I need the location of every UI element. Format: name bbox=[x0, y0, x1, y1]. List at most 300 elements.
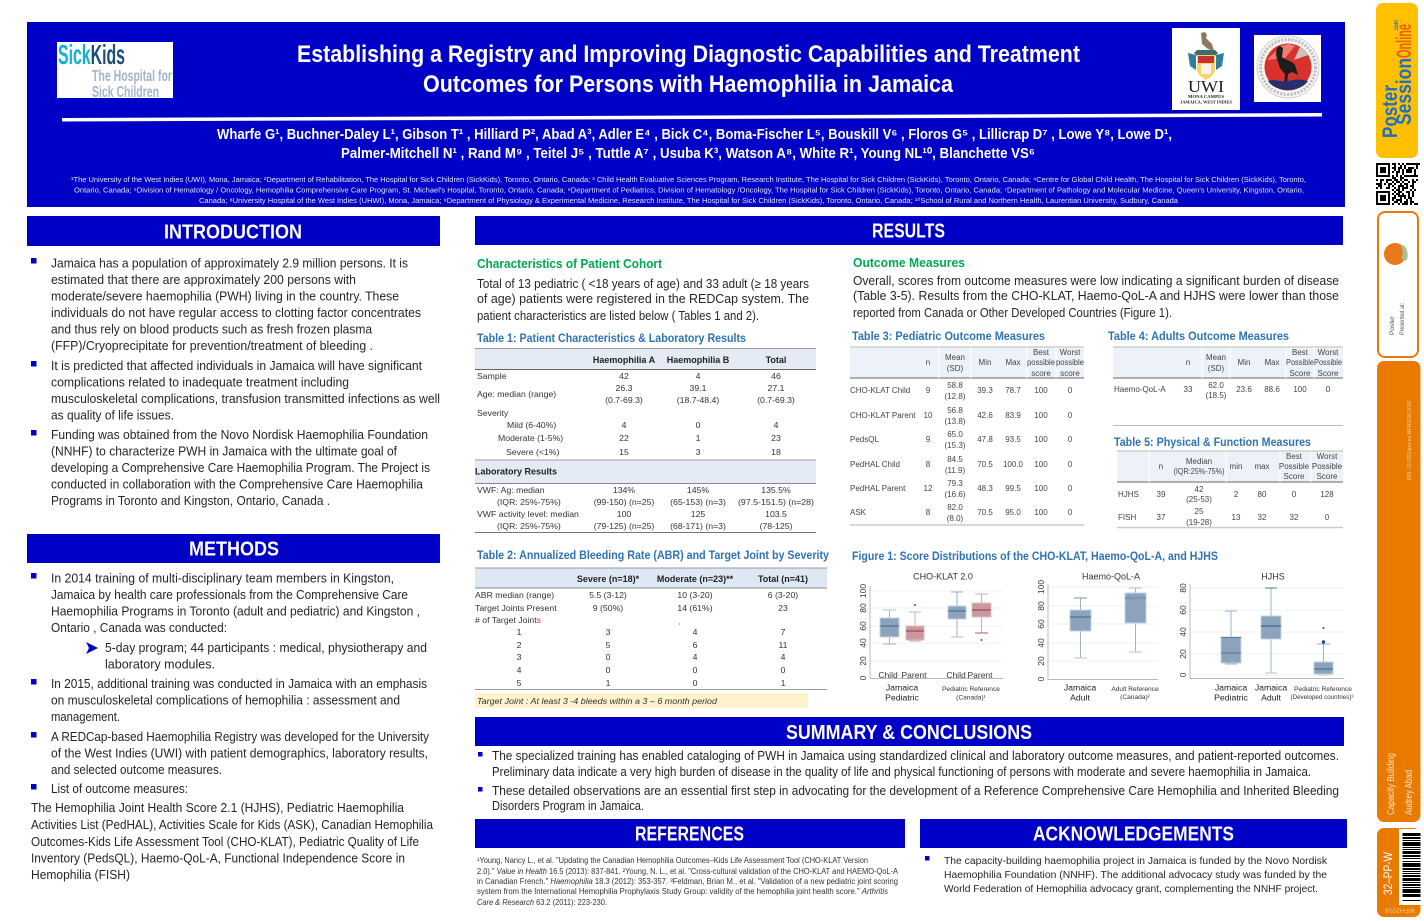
table 2: bleeding rate: 14 (61%) bbox=[677, 603, 713, 613]
introduction bullets: developing a Comprehensive Care Haemophilia Program. The Project is bbox=[51, 461, 430, 475]
methods bullets: of the West Indies (UWI) with patient demographics, laboratory results, bbox=[51, 746, 428, 760]
table 5: physical and function measures: HJHS bbox=[1118, 490, 1139, 499]
table 1: patient characteristics: Mild (6-40%) bbox=[507, 420, 556, 430]
chart: HJHS box plot: 20 bbox=[1178, 649, 1188, 659]
table 5: physical and function measures: max bbox=[1254, 462, 1270, 471]
chart: CHO-KLAT 2.0 box plot: 0 bbox=[858, 675, 868, 680]
summary bullets: Preliminary data indicate a very high burden of disease in the quality of life and physical functioning of persons with moderate and severe haemophilia in Jamaica. bbox=[492, 765, 1311, 779]
table 3: pediatric outcome measures: PedHAL Parent bbox=[850, 484, 906, 493]
introduction bullets: moderate/severe haemophilia (PWH) living in the country. These bbox=[51, 290, 399, 304]
table 3: pediatric outcome measures: 9 bbox=[926, 435, 931, 444]
table 1: patient characteristics: 145% bbox=[687, 485, 709, 495]
heading: references bbox=[475, 819, 905, 848]
heading: table 3: Table 3: Pediatric Outcome Measures bbox=[852, 331, 1045, 343]
chart: Haemo-QoL-A box plot: Jamaica bbox=[1064, 682, 1096, 692]
sidebar: PosterSessionOnline badge: Session bbox=[1393, 58, 1416, 125]
table 2: bleeding rate: Moderate (n=23)** bbox=[657, 574, 734, 584]
table 3: pediatric outcome measures: 8 bbox=[926, 508, 931, 517]
table 4: adults outcome measures: 0 bbox=[1326, 385, 1331, 394]
introduction bullets: conducted in collaboration with the Comprehensive Care Haemophilia bbox=[51, 478, 423, 492]
table 3: pediatric outcome measures: 99.5 bbox=[1005, 484, 1021, 493]
table 2: bleeding rate: 3 bbox=[517, 652, 522, 662]
methods bullets: In 2015, additional training was conducted in Jamaica with an emphasis bbox=[51, 677, 427, 691]
table 2: bleeding rate: 0 bbox=[693, 665, 698, 675]
summary bullets: These detailed observations are an essential first step in advocating for the development of a Reference Comprehensive Care Hemophilia and Inherited Bleeding bbox=[492, 784, 1339, 798]
reference list bbox=[477, 856, 899, 907]
icon: congress logo bbox=[1384, 243, 1408, 265]
chart: CHO-KLAT 2.0 box plot: Jamaica bbox=[886, 682, 918, 692]
sidebar: PosterSessionOnline badge: .com bbox=[1394, 20, 1400, 31]
table 2: bleeding rate: 4 bbox=[781, 652, 786, 662]
table 2: bleeding rate bbox=[475, 568, 827, 690]
sidebar: presented at box: Poster bbox=[1389, 315, 1396, 335]
table 1: patient characteristics: Severe (<1%) bbox=[506, 447, 559, 457]
table 5: physical and function measures: (IQR:25%-75%) bbox=[1174, 467, 1225, 476]
heading: acknowledgements bbox=[920, 819, 1347, 848]
text: cohort summary: Total of 13 pediatric ( <18 years of age) and 33 adult (≥ 18 years bbox=[477, 277, 809, 291]
table 3: pediatric outcome measures: 100 bbox=[1034, 411, 1048, 420]
sidebar: topic panel: DOI: 10.3252/pso.eu.WFH2016.2016 bbox=[1407, 401, 1413, 480]
table 5: physical and function measures: Worst bbox=[1317, 452, 1338, 461]
table 3: pediatric outcome measures: 93.5 bbox=[1005, 435, 1021, 444]
table 3: pediatric outcome measures: (12.8) bbox=[945, 392, 966, 401]
table 4: adults outcome measures: Haemo-QoL-A bbox=[1114, 385, 1166, 394]
table 5: physical and function measures: 37 bbox=[1157, 513, 1166, 522]
table 3: pediatric outcome measures: 100 bbox=[1034, 508, 1048, 517]
chart: Haemo-QoL-A box plot: 40 bbox=[1036, 638, 1046, 648]
table 1: patient characteristics: (68-171) (n=3) bbox=[670, 521, 726, 531]
table 5: physical and function measures: 2 bbox=[1234, 490, 1239, 499]
table 1: patient characteristics: 18 bbox=[771, 447, 781, 457]
box: Jamaica parent bbox=[906, 604, 924, 641]
reference list: ¹Young, Nancy L., et al. "Updating the Canadian Hemophilia Outcomes–Kids Life Assessment Tool (CHO-KLAT Version bbox=[477, 856, 868, 865]
logo: SickKids: Sick Children bbox=[92, 84, 159, 101]
methods bullets: Haemophilia Programs in Toronto (adult and pediatric) and Kingston , bbox=[51, 604, 420, 618]
introduction bullets: estimated that there are approximately 200 persons with bbox=[51, 273, 356, 287]
chart: HJHS box plot: Pediatric bbox=[1214, 692, 1249, 702]
acknowledgement text bbox=[925, 855, 1328, 895]
text: cohort summary: of age) patients were registered in the REDCap system. The bbox=[477, 292, 809, 306]
table 3: pediatric outcome measures: 100 bbox=[1034, 386, 1048, 395]
table 3: pediatric outcome measures: PedHAL Child bbox=[850, 460, 900, 469]
heading: table 2: Table 2: Annualized Bleeding Rate (ABR) and Target Joint by Severity bbox=[477, 550, 830, 562]
logo: UWI crest: UWI bbox=[1188, 77, 1224, 96]
table 1: patient characteristics: (0.7-69.3) bbox=[605, 395, 643, 405]
logo: UWI crest: MONA CAMPUS bbox=[1188, 94, 1225, 99]
chart: Haemo-QoL-A box plot: 100 bbox=[1036, 580, 1046, 594]
table 1: patient characteristics: 26.3 bbox=[616, 383, 633, 393]
table 2: bleeding rate: 1 bbox=[781, 678, 786, 688]
table 2: bleeding rate: 4 bbox=[693, 652, 698, 662]
table 2: bleeding rate: 1 bbox=[517, 627, 522, 637]
table 5: physical and function measures: Possible bbox=[1312, 462, 1343, 471]
heading: outcome measures: Outcome Measures bbox=[853, 255, 965, 270]
table 5: physical and function measures: 0 bbox=[1292, 490, 1297, 499]
affiliations: Canada; ⁸University Hospital of the West Indies (UHWI), Mona, Jamaica; ⁹Department of Physiology & Experimental Medicine, Research Institute, The Hospital for Sick Children (SickKids), Toronto, Ontario, Canada; ¹⁰School of Rural and Northern Health, Laurentian University, Sudbury, Canada bbox=[199, 197, 1178, 205]
summary bullets: Disorders Program in Jamaica. bbox=[492, 799, 644, 813]
chart: CHO-KLAT 2.0 box plot: CHO-KLAT 2.0 bbox=[913, 572, 973, 582]
reference list: Care & Research 63.2 (2011): 223-230. bbox=[477, 898, 607, 907]
table 1: patient characteristics: 103.5 bbox=[765, 509, 787, 519]
reference list: 2.0)." Value in Health 16.5 (2013): 837-841. ²Young, N. L., et al. "Cross-cultural validation of the CHO-KLAT and HAEMO-QoL-A bbox=[477, 867, 899, 876]
chart: CHO-KLAT 2.0 box plot: Pediatric bbox=[885, 692, 920, 702]
methods bullets: laboratory modules. bbox=[105, 658, 215, 672]
table 2: bleeding rate: 10 (3-20) bbox=[677, 590, 713, 600]
table 2: bleeding rate: Severe (n=18)* bbox=[577, 574, 640, 584]
table 2: bleeding rate: 1 bbox=[606, 678, 611, 688]
reference list: system from the International Hemophilia Prophylaxis Study Group: validity of the hemophilia joint health score." Arthritis bbox=[477, 887, 888, 896]
table 1: patient characteristics: Laboratory Results bbox=[475, 466, 557, 476]
table 1: patient characteristics: (18.7-48.4) bbox=[677, 395, 719, 405]
table 1: patient characteristics: VWF: Ag: median bbox=[477, 485, 545, 495]
table 3: pediatric outcome measures: 70.5 bbox=[977, 508, 993, 517]
table 3: pediatric outcome measures: possible bbox=[1056, 358, 1085, 367]
table 5: physical and function measures: 42 bbox=[1195, 485, 1204, 494]
heading: figure 1: Figure 1: Score Distributions of the CHO-KLAT, Haemo-QoL-A, and HJHS bbox=[852, 551, 1218, 563]
chart: CHO-KLAT 2.0 box plot: Child bbox=[946, 670, 966, 680]
chart: Haemo-QoL-A box plot: 80 bbox=[1036, 601, 1046, 611]
table 3: pediatric outcome measures: 78.7 bbox=[1005, 386, 1021, 395]
text: outcome summary bbox=[853, 274, 1339, 320]
table 1: patient characteristics: 1 bbox=[696, 433, 701, 443]
acknowledgement text: Haemophilia Foundation (NNHF). The additional advocacy study was funded by the bbox=[944, 869, 1327, 881]
heading: acknowledgements: ACKNOWLEDGEMENTS bbox=[1033, 824, 1234, 846]
chart: HJHS box plot bbox=[1178, 572, 1354, 702]
table 1: patient characteristics: 4 bbox=[774, 420, 779, 430]
methods bullets: Inventory (PedsQL), Haemo-QoL-A, Functional Independence Score in bbox=[31, 852, 405, 866]
table 3: pediatric outcome measures: (8.0) bbox=[947, 514, 964, 523]
table 2: bleeding rate: 11 bbox=[778, 640, 788, 650]
box: Jamaica adult bbox=[1261, 588, 1281, 673]
table 1: patient characteristics: (IQR: 25%-75%) bbox=[497, 497, 561, 507]
table 3: pediatric outcome measures: score bbox=[1031, 369, 1051, 378]
chart: HJHS box plot: Adult bbox=[1261, 692, 1281, 702]
table 3: pediatric outcome measures: (16.6) bbox=[945, 490, 966, 499]
table 5: physical and function measures: Possible bbox=[1279, 462, 1310, 471]
table 1: patient characteristics: 27.1 bbox=[768, 383, 785, 393]
table 4: adults outcome measures: 33 bbox=[1184, 385, 1193, 394]
chart: HJHS box plot: (Developed countries)³ bbox=[1290, 694, 1354, 701]
table 3: pediatric outcome measures: 79.3 bbox=[947, 479, 963, 488]
introduction bullets: musculoskeletal complications, transfusion transmitted infections as well bbox=[51, 392, 440, 406]
chart: CHO-KLAT 2.0 box plot: Parent bbox=[901, 670, 927, 680]
logo: UWI crest: JAMAICA, WEST INDIES bbox=[1180, 100, 1232, 104]
table 3: pediatric outcome measures: score bbox=[1060, 369, 1080, 378]
table 1: patient characteristics: Haemophilia A bbox=[593, 355, 656, 365]
introduction bullets: as quality of life issues. bbox=[51, 408, 174, 422]
methods bullets: In 2014 training of multi-disciplinary team members in Kingston, bbox=[51, 572, 394, 586]
table 5: physical and function measures: n bbox=[1159, 462, 1163, 471]
table 1: patient characteristics: Total bbox=[766, 355, 786, 365]
chart: HJHS box plot: Pediatric Reference bbox=[1294, 686, 1352, 693]
methods bullets: Hemophilia (FISH) bbox=[31, 868, 130, 882]
table 3: pediatric outcome measures: 0 bbox=[1068, 508, 1073, 517]
introduction bullets: (NNHF) to characterize PWH in Jamaica with the ultimate goal of bbox=[51, 444, 398, 458]
table 3: pediatric outcome measures: (15.3) bbox=[945, 441, 966, 450]
table 1: patient characteristics: 46 bbox=[771, 371, 781, 381]
table 5: physical and function measures: 0 bbox=[1325, 513, 1330, 522]
table 1: patient characteristics: 4 bbox=[622, 420, 627, 430]
table 1: patient characteristics: (79-125) (n=25) bbox=[594, 521, 654, 531]
table 3: pediatric outcome measures: n bbox=[926, 358, 930, 367]
panel: methods bbox=[27, 534, 440, 882]
chart: HJHS box plot: Jamaica bbox=[1255, 682, 1287, 692]
table 3: pediatric outcome measures: 9 bbox=[926, 386, 931, 395]
table 2: bleeding rate: 3 bbox=[606, 627, 611, 637]
table 4: adults outcome measures: Max bbox=[1264, 358, 1280, 367]
chart: HJHS box plot: 0 bbox=[1178, 672, 1188, 677]
table 5: physical and function measures: Best bbox=[1286, 452, 1303, 461]
chart: CHO-KLAT 2.0 box plot: Child bbox=[878, 670, 898, 680]
table 1: patient characteristics: Moderate (1-5%) bbox=[498, 433, 563, 443]
affiliations: Ontario, Canada; ⁵Division of Hematology / Oncology, Hemophilia Comprehensive Care Program, St. Michael's Hospital, Toronto, Ontario, Canada; ⁶Department of Pediatrics, Division of Hematology /Oncology, The Hospital for Sick Children (SickKids), Toronto, Ontario, Canada; ⁷Department of Pathology and Molecular Medicine, Queen's University, Kingston, Ontario, bbox=[74, 188, 1304, 194]
authors: Wharfe G¹, Buchner-Daley L¹, Gibson T¹ , Hilliard P², Abad A³, Adler E⁴ , Bick C⁴, Boma-Fischer L⁵, Bouskill V⁶ , Floros G⁵ , Lillicrap D⁷ , Lowe Y⁸, Lowe D¹, bbox=[217, 127, 1172, 143]
introduction bullets: Funding was obtained from the Novo Nordisk Haemophilia Foundation bbox=[51, 428, 428, 442]
title bbox=[297, 41, 1080, 98]
text: outcome summary: (Table 3-5). Results from the CHO-KLAT, Haemo-QoL-A and HJHS were lower than those bbox=[853, 289, 1339, 303]
methods bullets bbox=[31, 572, 433, 882]
table 5: physical and function measures: FISH bbox=[1118, 513, 1136, 522]
sidebar: QR code bbox=[1376, 163, 1420, 206]
table 3: pediatric outcome measures: 100 bbox=[1034, 435, 1048, 444]
chart: Haemo-QoL-A box plot: 0 bbox=[1036, 676, 1046, 681]
acknowledgement text: The capacity-building haemophilia project in Jamaica is funded by the Novo Nordisk bbox=[944, 855, 1328, 867]
introduction bullets: complications related to inadequate treatment including bbox=[51, 376, 349, 390]
chart: HJHS box plot: HJHS bbox=[1261, 572, 1285, 582]
table 4: adults outcome measures: 62.0 bbox=[1208, 381, 1224, 390]
introduction bullets bbox=[31, 256, 440, 508]
methods bullets: A REDCap-based Haemophilia Registry was developed for the University bbox=[51, 730, 430, 744]
chart: Haemo-QoL-A box plot bbox=[1036, 572, 1159, 702]
table 5: physical and function measures: Median bbox=[1186, 457, 1212, 466]
table 2: bleeding rate: Target Joints Present bbox=[475, 603, 557, 613]
table 1: patient characteristics: 0 bbox=[696, 420, 701, 430]
table 3: pediatric outcome measures: 58.8 bbox=[947, 381, 963, 390]
authors bbox=[217, 127, 1172, 162]
title: Outcomes for Persons with Haemophilia in Jamaica bbox=[423, 71, 954, 98]
table 2: bleeding rate: ABR median (range) bbox=[475, 590, 554, 600]
chart: CHO-KLAT 2.0 box plot bbox=[858, 572, 1003, 702]
chart: CHO-KLAT 2.0 box plot: 100 bbox=[858, 584, 868, 598]
summary bullets bbox=[478, 749, 1339, 813]
chart: CHO-KLAT 2.0 box plot: Parent bbox=[967, 670, 993, 680]
table 3: pediatric outcome measures: 100 bbox=[1034, 460, 1048, 469]
box: reference bbox=[1314, 627, 1333, 675]
table 2: bleeding rate: 0 bbox=[606, 665, 611, 675]
table 5: physical and function measures: 80 bbox=[1258, 490, 1267, 499]
sidebar: poster number and barcode bbox=[1377, 828, 1422, 917]
heading: results bbox=[475, 216, 1343, 245]
table 3: pediatric outcome measures: Best bbox=[1033, 348, 1050, 357]
table 2: bleeding rate: 9 (50%) bbox=[593, 603, 623, 613]
sidebar: presented at box: Presented at: bbox=[1399, 303, 1406, 335]
table 1: patient characteristics: (0.7-69.3) bbox=[757, 395, 795, 405]
header banner bbox=[27, 22, 1345, 207]
methods bullets: The Hemophilia Joint Health Score 2.1 (HJHS), Pediatric Haemophilia bbox=[31, 801, 404, 815]
introduction bullets: (FFP)/Cryoprecipitate for prevention/treatment of bleeding . bbox=[51, 339, 373, 353]
table 2: bleeding rate: 5 bbox=[517, 678, 522, 688]
table 1: patient characteristics: 125 bbox=[691, 509, 705, 519]
sidebar: poster number and barcode: 32–PP-W bbox=[1381, 851, 1395, 895]
heading: table 5: Table 5: Physical & Function Measures bbox=[1114, 437, 1311, 449]
logo: University Hospital of the West Indies bbox=[1254, 35, 1321, 102]
chart: Haemo-QoL-A box plot: 20 bbox=[1036, 656, 1046, 666]
table 3: pediatric outcome measures: ASK bbox=[850, 508, 867, 517]
table 2: bleeding rate: 4 bbox=[517, 665, 522, 675]
table 4: adults outcome measures: Score bbox=[1290, 369, 1311, 378]
table 3: pediatric outcome measures: 65.0 bbox=[947, 430, 963, 439]
chart: CHO-KLAT 2.0 box plot: 40 bbox=[858, 638, 868, 648]
divider line bbox=[62, 113, 1322, 122]
table 2: bleeding rate: 0 bbox=[781, 665, 786, 675]
text: outcome summary: Overall, scores from outcome measures were low indicating a significant burden of disease bbox=[853, 274, 1339, 288]
heading: methods: METHODS bbox=[189, 538, 279, 560]
logo: SickKids bbox=[57, 39, 173, 101]
table 3: pediatric outcome measures: CHO-KLAT Parent bbox=[850, 411, 916, 420]
heading: results: RESULTS bbox=[872, 220, 945, 242]
methods bullets: Jamaica by health care professionals from the Comprehensive Care bbox=[51, 588, 408, 602]
table 3: pediatric outcome measures: 0 bbox=[1068, 411, 1073, 420]
chart: CHO-KLAT 2.0 box plot: 80 bbox=[858, 603, 868, 613]
table 3: pediatric outcome measures bbox=[850, 347, 1085, 525]
table 3: pediatric outcome measures: 56.8 bbox=[947, 406, 963, 415]
methods bullets: on musculoskeletal complications of hemophilia : assessment and bbox=[51, 694, 400, 708]
table 4: adults outcome measures bbox=[1113, 347, 1343, 426]
table 1: patient characteristics: 134% bbox=[613, 485, 635, 495]
box: Jamaica pediatric bbox=[1221, 611, 1241, 664]
table 1: patient characteristics: (97.5-151.5) (n=28) bbox=[738, 497, 814, 507]
heading: introduction: INTRODUCTION bbox=[164, 222, 302, 244]
affiliations: ¹The University of the West Indies (UWI), Mona, Jamaica; ²Department of Rehabilitation, The Hospital for Sick Children (SickKids), Toronto, Ontario, Canada; ³ Child Health Evaluative Sciences Program, Research Institute, The Hospital for Sick Children (SickKids), Toronto, Ontario, Canada; ⁴Centre for Global Child Health, The Hospital for Sick Children (SickKids), Toronto, bbox=[71, 177, 1306, 184]
table 3: pediatric outcome measures: Max bbox=[1005, 358, 1021, 367]
table 1: patient characteristics: Haemophilia B bbox=[667, 355, 730, 365]
table 2: bleeding rate: 6 (3-20) bbox=[768, 590, 798, 600]
table 4: adults outcome measures: 23.6 bbox=[1236, 385, 1252, 394]
table 2: bleeding rate: 0 bbox=[693, 678, 698, 688]
callout: target joint definition: Target Joint : At least 3 -4 bleeds within a 3 – 6 month period bbox=[477, 696, 718, 706]
table 2: bleeding rate: 4 bbox=[693, 627, 698, 637]
methods bullets: management. bbox=[51, 710, 120, 724]
introduction bullets: Programs in Toronto and Kingston, Ontario, Canada . bbox=[51, 494, 330, 508]
heading: methods bbox=[27, 534, 440, 563]
table 1: patient characteristics: (IQR: 25%-75%) bbox=[497, 521, 561, 531]
table 4: adults outcome measures: n bbox=[1186, 358, 1190, 367]
chart: Haemo-QoL-A box plot: (Canada)² bbox=[1120, 694, 1151, 701]
heading: introduction bbox=[27, 216, 440, 246]
table 4: adults outcome measures: 88.6 bbox=[1264, 385, 1280, 394]
table 3: pediatric outcome measures: 42.6 bbox=[977, 411, 993, 420]
table 3: pediatric outcome measures: 0 bbox=[1068, 460, 1073, 469]
text: cohort summary: patient characteristics are listed below ( Tables 1 and 2). bbox=[477, 309, 759, 323]
table 1: patient characteristics: VWF activity level: median bbox=[477, 509, 579, 519]
sidebar: topic panel: Capacity Building bbox=[1386, 753, 1397, 815]
table 2: bleeding rate: Total (n=41) bbox=[758, 574, 808, 584]
table 5: physical and function measures: Score bbox=[1284, 472, 1305, 481]
table 3: pediatric outcome measures: 48.3 bbox=[977, 484, 993, 493]
table 3: pediatric outcome measures: 0 bbox=[1068, 484, 1073, 493]
chart: Haemo-QoL-A box plot: Haemo-QoL-A bbox=[1082, 572, 1140, 582]
table 3: pediatric outcome measures: (13.8) bbox=[945, 417, 966, 426]
table 3: pediatric outcome measures: possible bbox=[1027, 358, 1056, 367]
table 1: patient characteristics: 100 bbox=[617, 509, 631, 519]
table 1: patient characteristics: 15 bbox=[619, 447, 629, 457]
table 3: pediatric outcome measures: 0 bbox=[1068, 386, 1073, 395]
heading: characteristics of patient cohort: Characteristics of Patient Cohort bbox=[477, 256, 663, 271]
table 3: pediatric outcome measures: 100 bbox=[1034, 484, 1048, 493]
authors: Palmer-Mitchell N¹ , Rand M⁹ , Teitel J⁵ , Tuttle A⁷ , Usuba K³, Watson A⁸, White R¹, Young NL¹⁰, Blanchette VS⁶ bbox=[341, 146, 1035, 162]
table 1: patient characteristics: Age: median (range) bbox=[477, 389, 556, 399]
table 3: pediatric outcome measures: CHO-KLAT Child bbox=[850, 386, 910, 395]
logo: SickKids: SickKids bbox=[58, 39, 125, 70]
table 1: patient characteristics: 135.5% bbox=[761, 485, 791, 495]
box: reference adult bbox=[1125, 588, 1146, 652]
heading: table 4: Table 4: Adults Outcome Measures bbox=[1108, 331, 1289, 343]
title: Establishing a Registry and Improving Diagnostic Capabilities and Treatment bbox=[297, 41, 1080, 68]
text: cohort summary bbox=[477, 277, 809, 323]
methods bullets: Activities List (PedHAL), Activities Scale for Kids (ASK), Canadian Hemophilia bbox=[31, 818, 433, 832]
panel: summary and conclusions bbox=[475, 717, 1344, 813]
chart: HJHS box plot: Jamaica bbox=[1215, 682, 1247, 692]
table 3: pediatric outcome measures: 84.5 bbox=[947, 455, 963, 464]
box: reference child bbox=[948, 592, 966, 637]
table 3: pediatric outcome measures: 10 bbox=[924, 411, 933, 420]
table 3: pediatric outcome measures: 70.5 bbox=[977, 460, 993, 469]
table 5: physical and function measures: min bbox=[1230, 462, 1242, 471]
table 1: patient characteristics: Sample bbox=[477, 371, 507, 381]
table 3: pediatric outcome measures: 83.9 bbox=[1005, 411, 1021, 420]
table 5: physical and function measures: 39 bbox=[1157, 490, 1166, 499]
table 4: adults outcome measures: Worst bbox=[1318, 348, 1339, 357]
table 5: physical and function measures: 32 bbox=[1290, 513, 1299, 522]
sidebar: presented at box bbox=[1378, 212, 1418, 357]
panel: introduction bbox=[27, 216, 440, 508]
affiliations bbox=[71, 177, 1306, 205]
acknowledgement text: World Federation of Hemophilia advocacy grant, complementing the NNHF project. bbox=[944, 883, 1318, 895]
methods bullets: Ontario , Canada was conducted: bbox=[51, 621, 227, 635]
heading: summary: SUMMARY & CONCLUSIONS bbox=[786, 722, 1032, 744]
chart: CHO-KLAT 2.0 box plot: (Canada)¹ bbox=[956, 694, 987, 702]
table 2: bleeding rate: 6 bbox=[693, 640, 698, 650]
table 1: patient characteristics: 3 bbox=[696, 447, 701, 457]
table 5: physical and function measures bbox=[1117, 451, 1343, 528]
table 3: pediatric outcome measures: 95.0 bbox=[1005, 508, 1021, 517]
table 1: patient characteristics: 23 bbox=[771, 433, 781, 443]
table 1: patient characteristics: (99-150) (n=25) bbox=[594, 497, 654, 507]
introduction bullets: individuals do not have regular access to clotting factor concentrates bbox=[51, 306, 421, 320]
chart: HJHS box plot: 80 bbox=[1178, 583, 1188, 593]
table 5: physical and function measures: 32 bbox=[1258, 513, 1267, 522]
sidebar: PosterSessionOnline badge bbox=[1376, 3, 1418, 158]
methods bullets: 5-day program; 44 participants : medical, physiotherapy and bbox=[105, 641, 427, 655]
table 2: bleeding rate: # of Target Joints bbox=[475, 615, 542, 625]
table 3: pediatric outcome measures: Worst bbox=[1060, 348, 1081, 357]
table 5: physical and function measures: (25-53) bbox=[1186, 495, 1212, 504]
table 3: pediatric outcome measures: 47.8 bbox=[977, 435, 993, 444]
table 3: pediatric outcome measures: (SD) bbox=[947, 364, 964, 373]
heading: table 1: Table 1: Patient Characteristics & Laboratory Results bbox=[477, 333, 746, 345]
table 2: bleeding rate: 0 bbox=[606, 652, 611, 662]
table 3: pediatric outcome measures: 12 bbox=[924, 484, 933, 493]
table 3: pediatric outcome measures: Min bbox=[979, 358, 991, 367]
introduction bullets: Jamaica has a population of approximately 2.9 million persons. It is bbox=[51, 256, 408, 270]
methods bullets: and selected outcome measures. bbox=[51, 763, 222, 777]
table 1: patient characteristics: Severity bbox=[477, 408, 509, 418]
chart: CHO-KLAT 2.0 box plot: Pediatric Reference bbox=[942, 686, 1000, 693]
chart: Haemo-QoL-A box plot: Adult Reference bbox=[1111, 686, 1159, 693]
table 3: pediatric outcome measures: (11.9) bbox=[945, 466, 965, 475]
table 3: pediatric outcome measures: PedsQL bbox=[850, 435, 879, 444]
table 4: adults outcome measures: (18.5) bbox=[1206, 391, 1227, 400]
